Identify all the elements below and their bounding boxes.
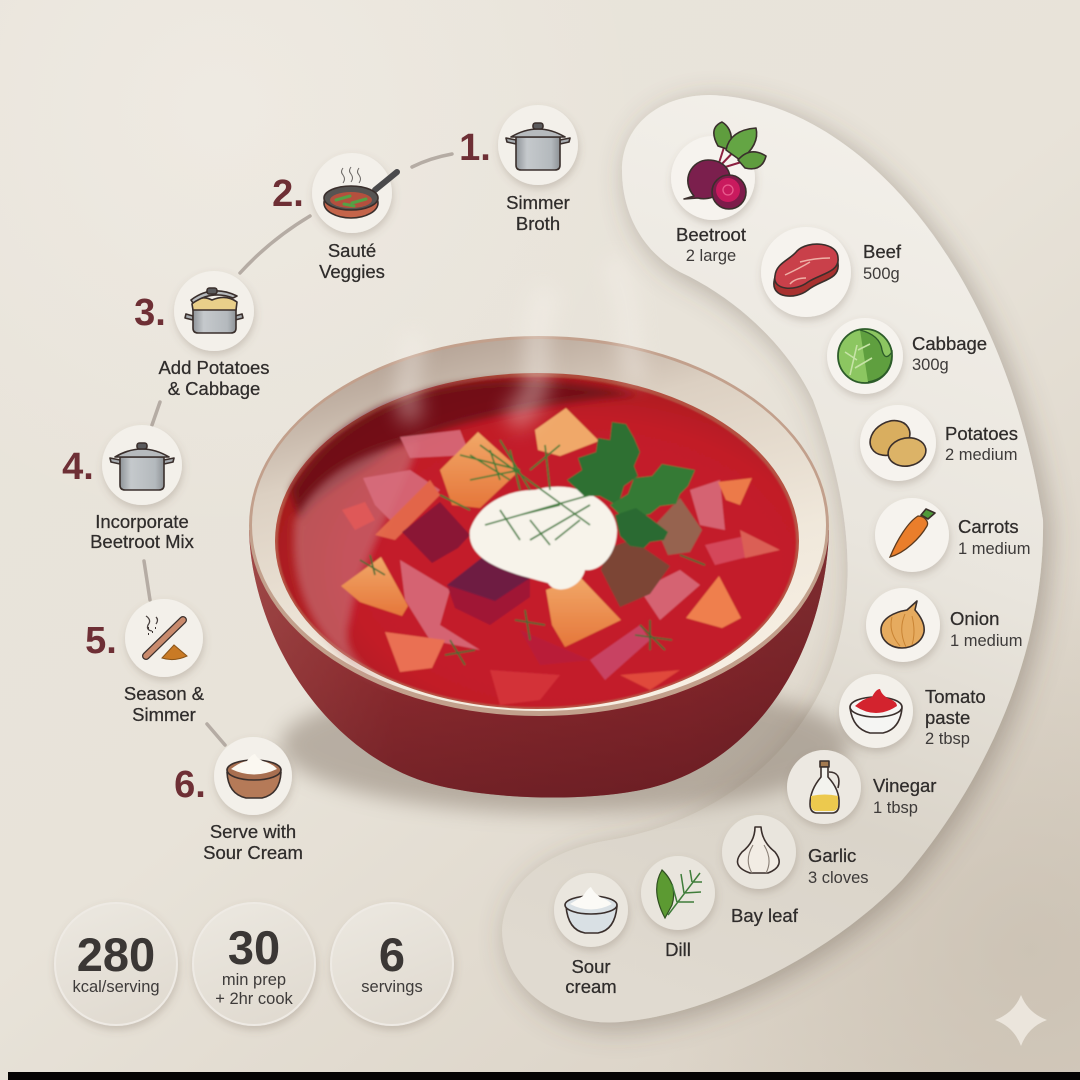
ingredient: sour cream (554, 873, 628, 997)
label: sour cream: Sour (571, 956, 611, 977)
stat caption: + 2hr cook (215, 990, 293, 1008)
ingredient: beef (761, 227, 902, 317)
icon: pot (102, 425, 182, 505)
quantity: vinegar: 1 tbsp (873, 799, 918, 817)
ingredient: beetroot (671, 122, 766, 265)
label: cabbage: Cabbage (912, 333, 987, 354)
icon circle and vinegar bottle (787, 750, 861, 824)
bowl of borscht (249, 260, 850, 813)
quantity: carrots: 1 medium (958, 540, 1030, 558)
broth glossy reflection (294, 440, 420, 690)
quantity: garlic: 3 cloves (808, 869, 869, 887)
stat: time (193, 903, 315, 1025)
step 5: season and simmer (85, 599, 205, 725)
ingredient: tomato paste (839, 674, 986, 748)
icon circle and potatoes (860, 405, 936, 481)
icon circle and beef steak (761, 227, 851, 317)
icon circle and onion (866, 588, 940, 662)
quantity: tomato paste: 2 tbsp (925, 730, 970, 748)
stat disc (331, 903, 453, 1025)
parsley garnish (567, 422, 695, 548)
ingredient: carrots (875, 498, 1030, 572)
label: potatoes: Potatoes (945, 423, 1018, 444)
label: tomato paste: paste (925, 707, 970, 728)
beef chunks (601, 540, 670, 607)
icon: frying pan (312, 153, 397, 233)
label: garlic: Garlic (808, 845, 856, 866)
step label 5: Simmer (132, 704, 196, 725)
stat disc (55, 903, 177, 1025)
dill garnish (440, 440, 590, 545)
stat caption: servings (361, 978, 423, 996)
ingredient: onion (866, 588, 1022, 662)
label: sour cream: cream (565, 976, 617, 997)
label: beetroot: Beetroot (676, 224, 746, 245)
ingredient: dill and bay leaf (641, 856, 799, 960)
bowl cast shadow (280, 677, 850, 813)
label: vinegar: Vinegar (873, 775, 936, 796)
icon circle and cabbage (827, 318, 903, 394)
bottom black bar (8, 1072, 1080, 1080)
quantity: cabbage: 300g (912, 356, 949, 374)
ingredient: vinegar (787, 750, 936, 824)
quantity: beetroot: 2 large (686, 247, 736, 265)
step 6: serve with sour cream (174, 737, 303, 863)
quantity: potatoes: 2 medium (945, 446, 1017, 464)
sour cream dollop (470, 487, 617, 589)
sparkle watermark (995, 995, 1047, 1046)
icon circle with bay leaf and dill (641, 856, 715, 930)
bowl rim (249, 336, 829, 716)
step number 3: 3. (134, 292, 166, 334)
step 4: incorporate beetroot mix (62, 425, 195, 552)
icon: spices (125, 599, 203, 677)
step label 1: Simmer (506, 192, 570, 213)
soup and ingredients (278, 377, 796, 707)
ingredient: cabbage (827, 318, 987, 394)
label: bay leaf: Bay leaf (731, 905, 799, 926)
stat number: 6 (379, 928, 405, 981)
step label 4: Beetroot Mix (90, 531, 195, 552)
steam (407, 260, 640, 420)
ingredient: garlic (722, 815, 869, 889)
stat: servings (331, 903, 453, 1025)
step 1: simmer broth (459, 105, 578, 234)
step 2: saute veggies (272, 153, 397, 282)
label: carrots: Carrots (958, 516, 1019, 537)
step number 2: 2. (272, 173, 304, 215)
stat caption: min prep (222, 971, 286, 989)
icon circle and sour cream bowl (554, 873, 628, 947)
icon: bowl of cream (214, 737, 292, 815)
connector lines between steps (144, 154, 452, 745)
stat disc (193, 903, 315, 1025)
icon circle and carrot (875, 498, 949, 572)
stat number: 280 (77, 928, 155, 981)
stat: calories (55, 903, 177, 1025)
icon: filled pot (174, 271, 254, 351)
soup surface (278, 377, 796, 707)
bowl body (249, 530, 829, 798)
potato chunks (341, 408, 752, 672)
soup edge (275, 373, 799, 709)
quantity: onion: 1 medium (950, 632, 1022, 650)
step label 5: Season & (124, 683, 204, 704)
panel: ingredients background (502, 95, 1043, 1022)
step label 4: Incorporate (95, 511, 189, 532)
quantity: beef: 500g (863, 265, 900, 283)
icon circle and garlic (722, 815, 796, 889)
label: beef: Beef (863, 241, 902, 262)
ingredient: potatoes (860, 405, 1018, 481)
step number 4: 4. (62, 446, 94, 488)
step 3: add potatoes and cabbage (134, 271, 270, 399)
step number 1: 1. (459, 127, 491, 169)
step label 6: Serve with (210, 821, 296, 842)
label: tomato paste: Tomato (925, 686, 986, 707)
icon circle and beetroot (671, 122, 766, 220)
step label 1: Broth (516, 213, 560, 234)
icon circle and tomato paste bowl (839, 674, 913, 748)
step number 6: 6. (174, 764, 206, 806)
cabbage shreds (342, 430, 780, 705)
label: dill: Dill (665, 939, 691, 960)
small herbs (360, 555, 705, 665)
step number 5: 5. (85, 620, 117, 662)
dark broth top-left (290, 380, 640, 520)
step label 2: Veggies (319, 261, 385, 282)
icon: pot (498, 105, 578, 185)
stat number: 30 (228, 921, 280, 974)
stat caption: kcal/serving (72, 978, 160, 996)
step label 3: & Cabbage (168, 378, 260, 399)
label: onion: Onion (950, 608, 999, 629)
beetroot cubes (402, 502, 470, 563)
step label 2: Sauté (328, 240, 376, 261)
step label 6: Sour Cream (203, 842, 303, 863)
step label 3: Add Potatoes (158, 357, 270, 378)
